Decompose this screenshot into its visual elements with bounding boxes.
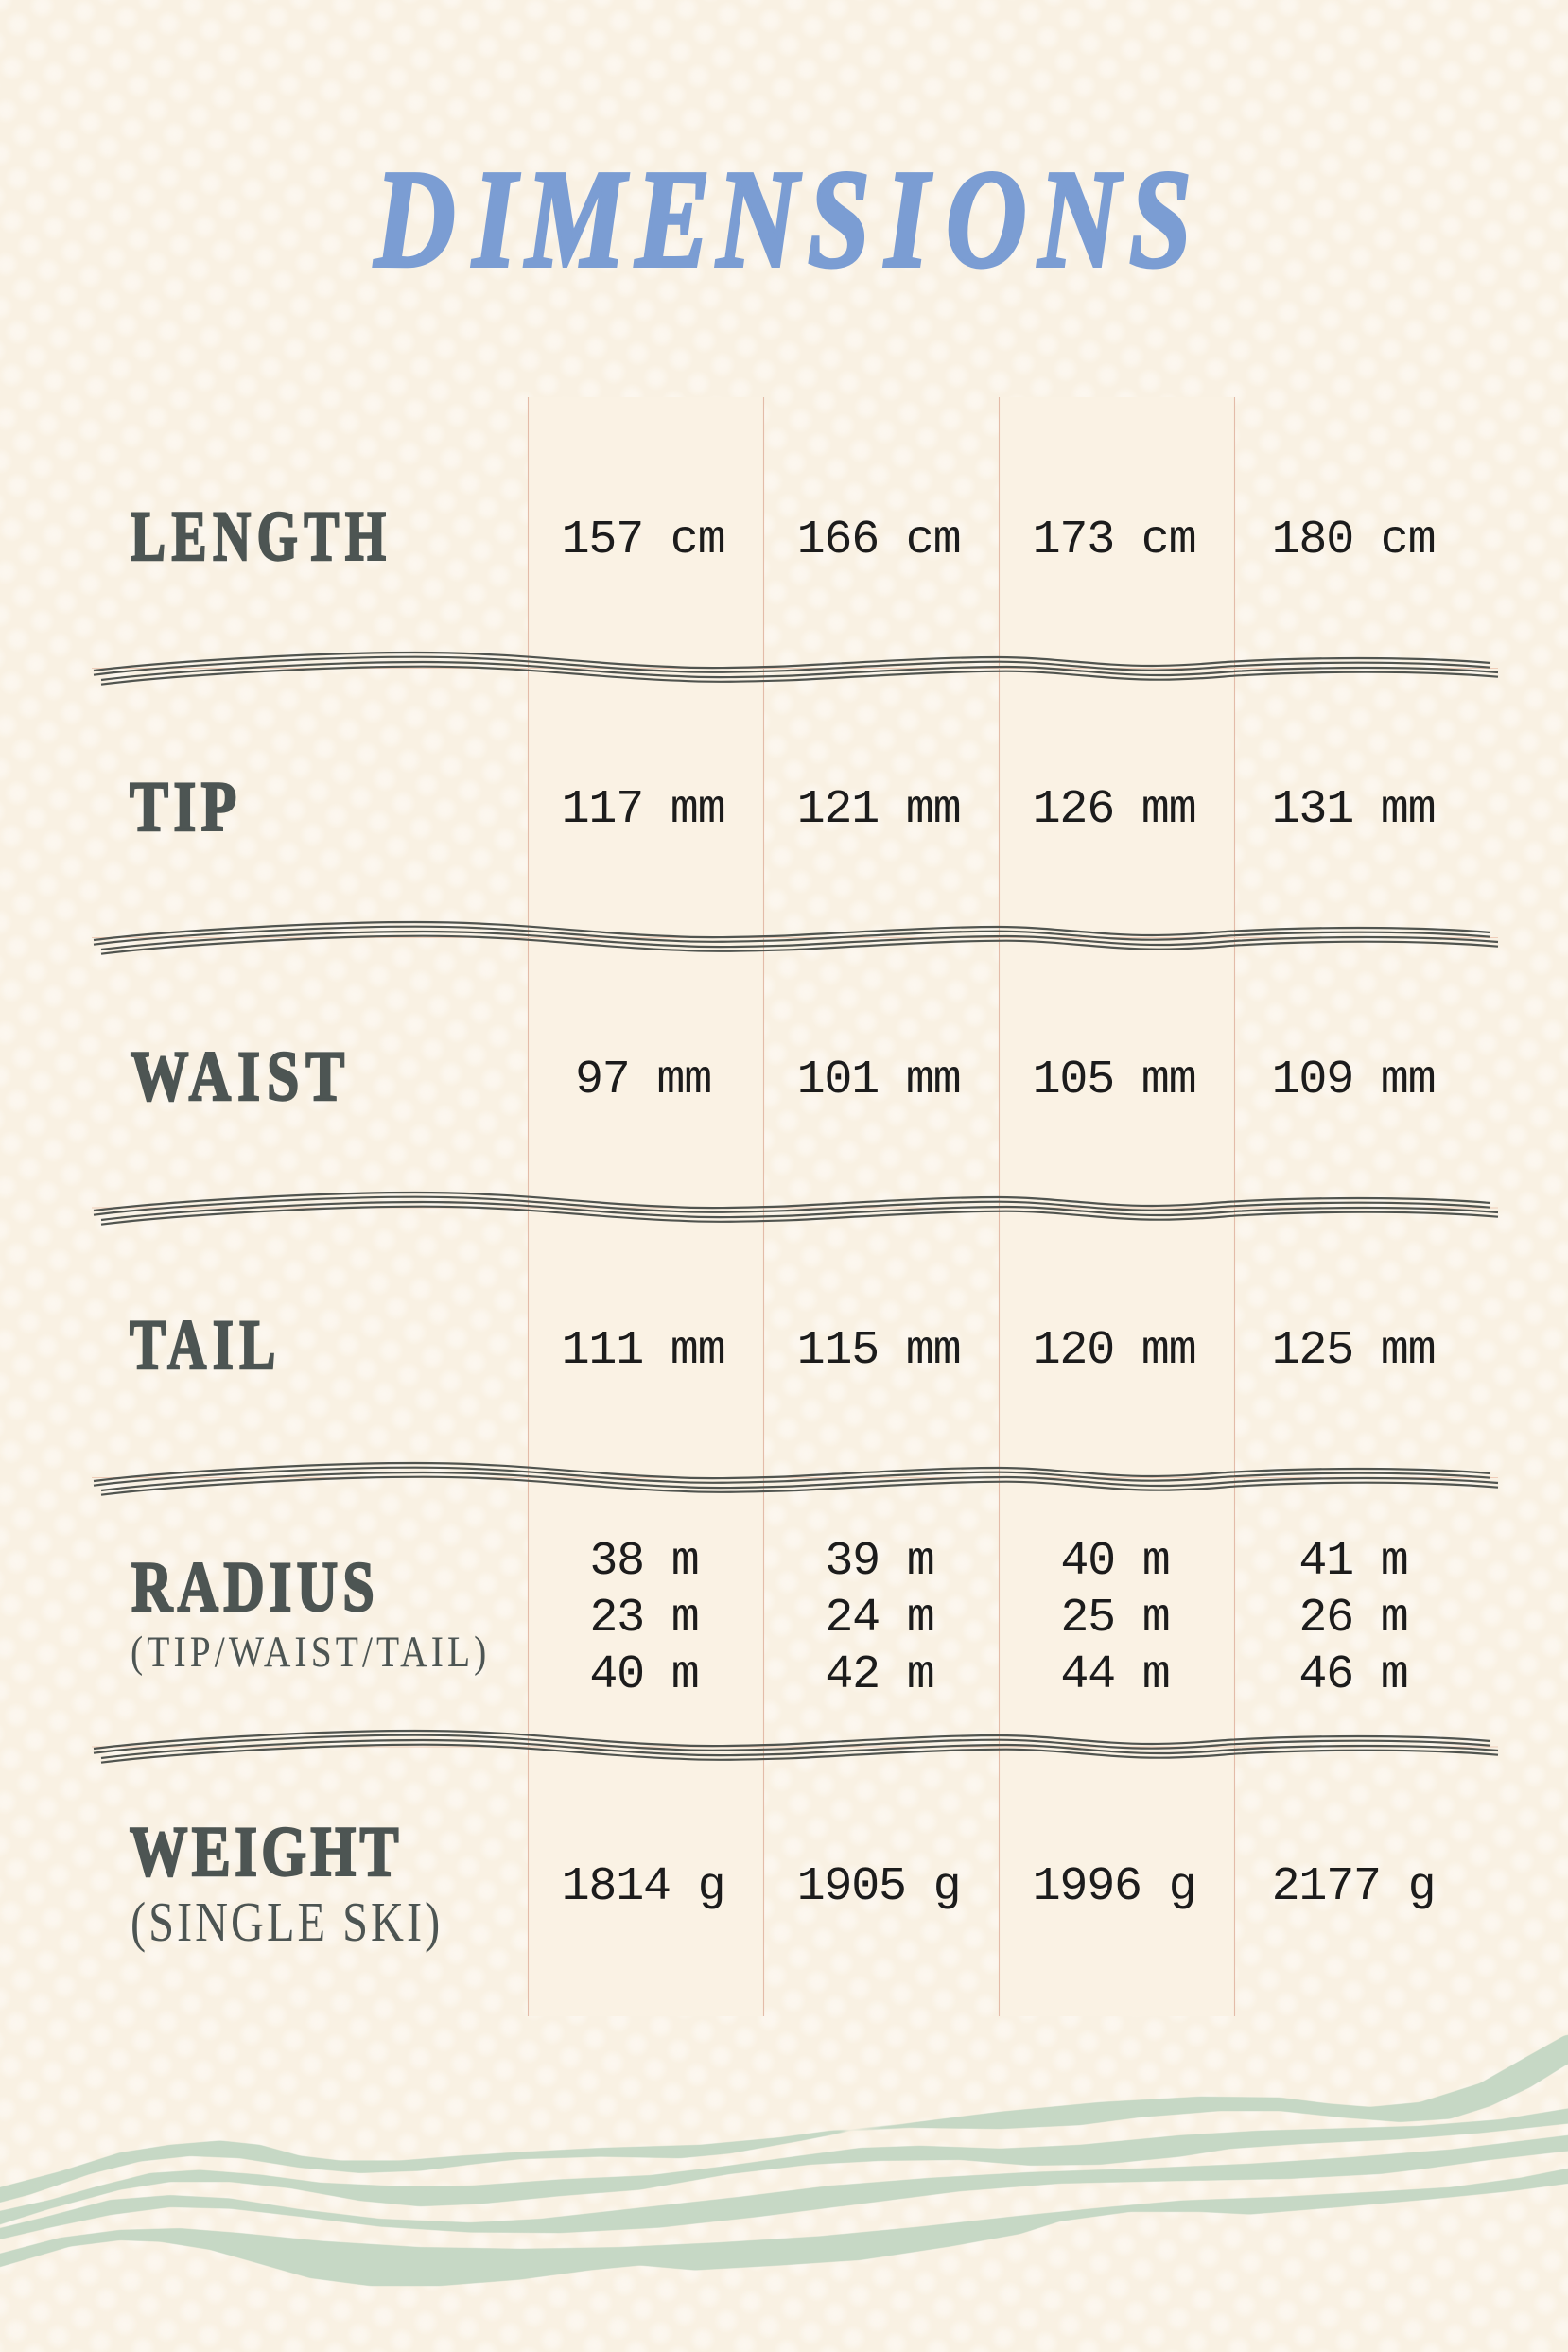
wave 4 — [0, 2166, 1568, 2286]
values: length: 173 cm — [1033, 514, 1195, 567]
panel: solid column 3 — [999, 397, 1234, 2016]
wave 3 — [0, 2133, 1568, 2243]
row: waist — [131, 1037, 1435, 1115]
values: tail: 115 mm — [797, 1324, 960, 1378]
values: waist: 109 mm — [1272, 1054, 1435, 1107]
wave 2 — [0, 2106, 1568, 2229]
values: radius: 25 m — [1060, 1592, 1170, 1646]
values: radius: 26 m — [1298, 1592, 1408, 1646]
row: radius — [131, 1535, 1408, 1702]
values: waist — [575, 1054, 1435, 1107]
values: length — [562, 514, 1435, 567]
values: length: 180 cm — [1272, 514, 1435, 567]
values: waist: 97 mm — [575, 1054, 711, 1107]
decorative green waves — [0, 2033, 1568, 2286]
values: tail: 120 mm — [1033, 1324, 1195, 1378]
row: tail — [130, 1307, 1435, 1385]
values: tip — [562, 783, 1435, 837]
row: weight — [130, 1812, 1435, 1953]
values: tip: 131 mm — [1272, 783, 1435, 837]
sublabel: tip/waist/tail: (TIP/WAIST/TAIL) — [131, 1628, 486, 1677]
divider 3 — [94, 1193, 1498, 1225]
values: waist: 105 mm — [1033, 1054, 1195, 1107]
label: weight: WEIGHT — [130, 1812, 399, 1890]
values: radius: 38 m — [589, 1535, 699, 1589]
divider 1 — [94, 653, 1498, 685]
label: waist: WAIST — [131, 1037, 344, 1115]
values: tip: 117 mm — [562, 783, 724, 837]
values: length: 166 cm — [797, 514, 960, 567]
values: tip: 121 mm — [797, 783, 960, 837]
label: tail: TAIL — [130, 1307, 275, 1385]
panel: solid column 1 — [528, 397, 763, 2016]
values: radius: 39 m — [825, 1535, 934, 1589]
values: radius — [589, 1535, 1408, 1702]
values: radius: 41 m — [1298, 1535, 1408, 1589]
wave 1 — [0, 2033, 1568, 2206]
label: tip: TIP — [130, 767, 236, 845]
values: radius: 24 m — [825, 1592, 934, 1646]
values: radius: 40 m — [589, 1648, 699, 1702]
values: tail: 125 mm — [1272, 1324, 1435, 1378]
divider 2 — [94, 922, 1498, 954]
values: radius: 46 m — [1298, 1648, 1408, 1702]
values: weight: 1996 g — [1033, 1860, 1195, 1914]
values: weight: 1905 g — [797, 1860, 960, 1914]
values: radius: 42 m — [825, 1648, 934, 1702]
values: weight: 2177 g — [1272, 1860, 1435, 1914]
values: weight — [562, 1860, 1435, 1914]
values: radius: 44 m — [1060, 1648, 1170, 1702]
divider 5 — [94, 1731, 1498, 1763]
values: weight: 1814 g — [562, 1860, 724, 1914]
label: radius: RADIUS — [131, 1547, 375, 1627]
values: radius: 40 m — [1060, 1535, 1170, 1589]
row: tip — [130, 767, 1435, 845]
values: radius: 23 m — [589, 1592, 699, 1646]
values: length: 157 cm — [562, 514, 724, 567]
row: length — [131, 497, 1435, 576]
title: DIMENSIONS — [374, 142, 1192, 296]
sublabel: single ski: (SINGLE SKI) — [131, 1891, 440, 1953]
values: waist: 101 mm — [797, 1054, 960, 1107]
values: tail — [562, 1324, 1435, 1378]
values: tail: 111 mm — [562, 1324, 724, 1378]
values: tip: 126 mm — [1033, 783, 1195, 837]
label: length: LENGTH — [131, 497, 386, 576]
divider 4 — [94, 1463, 1498, 1495]
